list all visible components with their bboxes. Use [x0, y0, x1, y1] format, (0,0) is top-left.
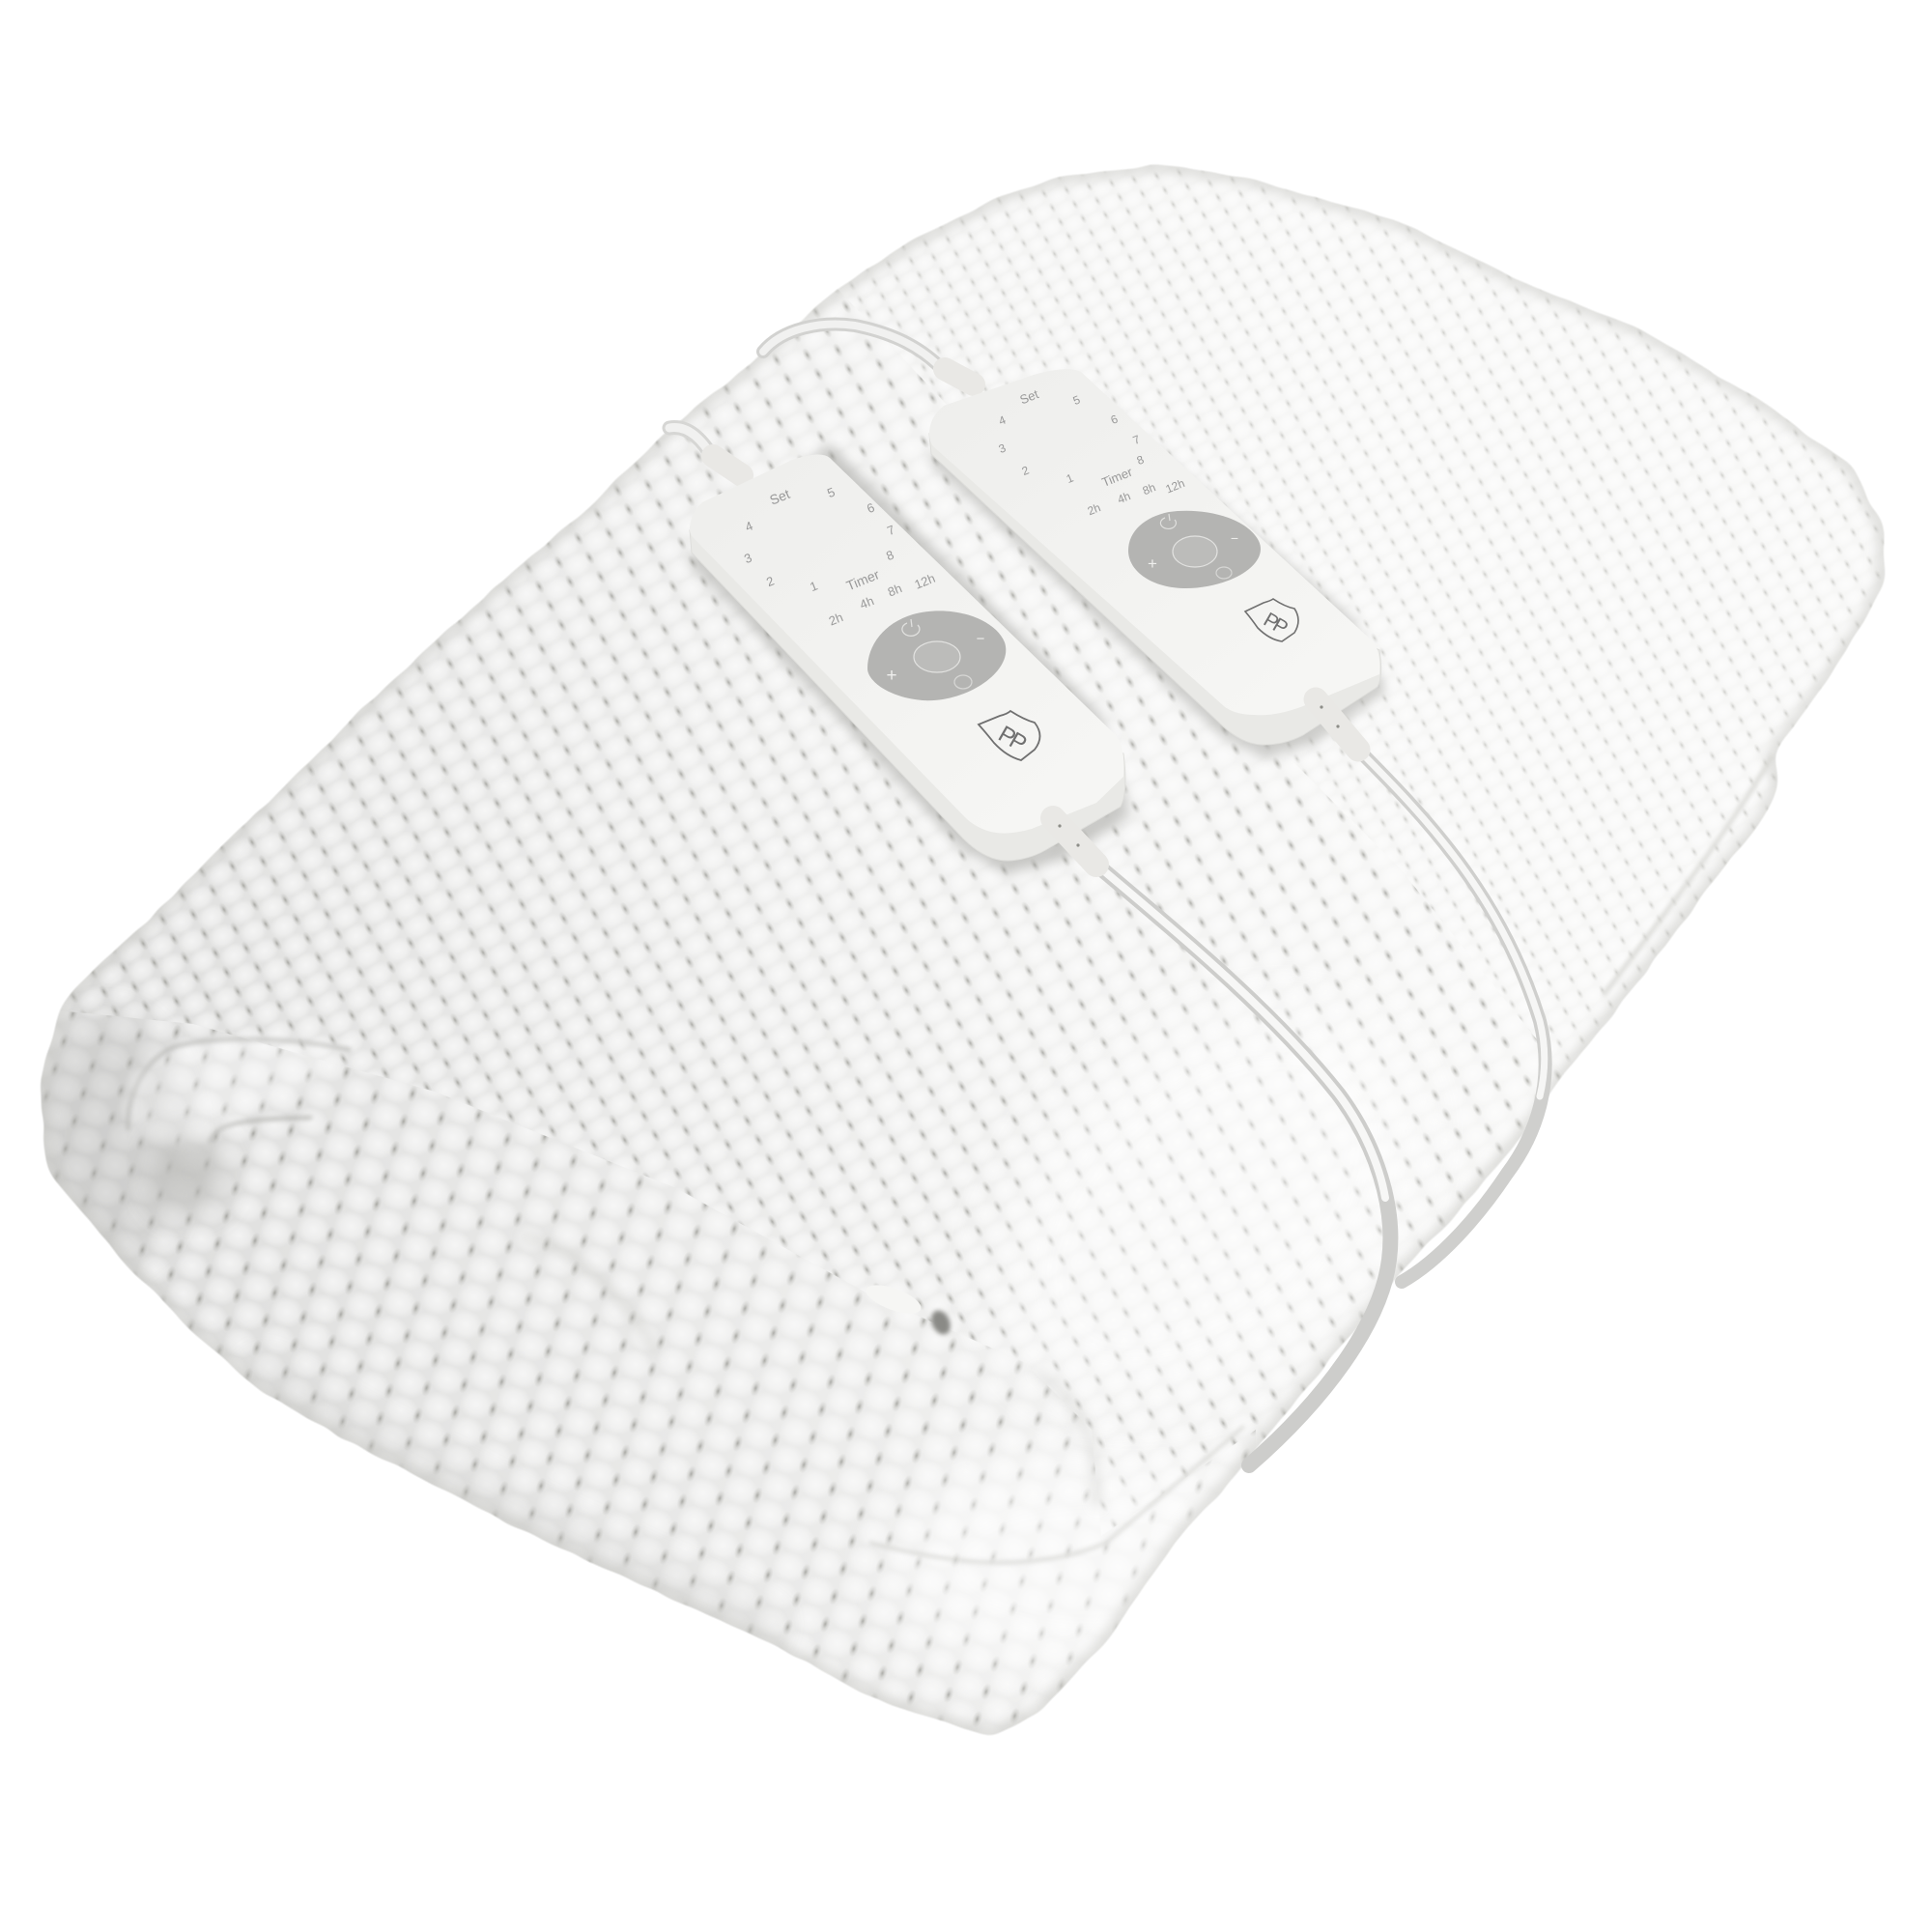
level labels: Timer [844, 566, 882, 593]
control dial [867, 611, 1006, 700]
control dial [1128, 511, 1261, 588]
cable connector [1053, 818, 1096, 865]
level labels: 6 [1109, 412, 1121, 427]
level labels: 7 [885, 523, 896, 538]
level labels: 4 [997, 412, 1009, 428]
power cable: right controller [1316, 699, 1546, 1282]
shield logo [1245, 599, 1298, 641]
level labels: 8h [1141, 480, 1157, 497]
level labels: 12h [912, 571, 937, 592]
level labels: 3 [742, 551, 753, 566]
controller shadow [688, 444, 1130, 874]
upper cables behind the controllers [669, 325, 974, 475]
level labels: 4h [858, 593, 876, 611]
level labels [742, 485, 937, 628]
controller: right [927, 369, 1386, 758]
rim shading along silhouette [40, 164, 1884, 1737]
level labels: 2h [827, 610, 845, 628]
cable connector [1316, 699, 1358, 750]
controller top surface [690, 454, 1123, 834]
level labels: 6 [865, 500, 876, 516]
power cable: left controller [1053, 818, 1390, 1465]
level labels: 8 [1135, 452, 1147, 468]
level labels: 4h [1116, 489, 1132, 506]
controller casing [929, 434, 1381, 745]
controller casing [690, 530, 1125, 861]
controller: left [688, 444, 1130, 874]
controller shadow [927, 386, 1386, 758]
level labels: 8 [884, 548, 895, 563]
shield logo: PP [994, 721, 1030, 757]
level labels: 5 [1071, 392, 1083, 408]
level labels: 2 [764, 574, 776, 589]
blanket base tone [41, 170, 1874, 1732]
level labels: 2 [1020, 463, 1032, 478]
control dial: − [977, 631, 985, 647]
level labels: 2h [1086, 500, 1102, 518]
level labels: Set [1017, 386, 1041, 407]
product photo: heated blanket [41, 164, 1886, 1735]
level labels: 8h [886, 581, 904, 599]
controller top surface [929, 369, 1379, 715]
level labels: 1 [1065, 470, 1076, 486]
level labels: 7 [1131, 432, 1143, 447]
blanket body [41, 164, 1886, 1735]
shield logo: PP [1260, 609, 1291, 639]
inner pocket of the fold [873, 1285, 953, 1337]
level labels: 4 [743, 519, 754, 534]
level labels: Timer [1099, 464, 1135, 490]
level labels: Set [767, 486, 792, 508]
level labels: 5 [825, 485, 837, 500]
control dial: + [886, 666, 897, 686]
knit texture [43, 170, 1884, 1725]
control dial: + [1148, 554, 1157, 573]
soft lighting [29, 926, 1498, 1681]
level labels [997, 386, 1186, 518]
level labels: 3 [997, 440, 1009, 456]
shield logo [979, 711, 1039, 760]
control dial: − [1231, 530, 1238, 546]
level labels: 12h [1164, 476, 1186, 497]
rolled end folds [128, 755, 1773, 1563]
level labels: 1 [808, 579, 819, 594]
